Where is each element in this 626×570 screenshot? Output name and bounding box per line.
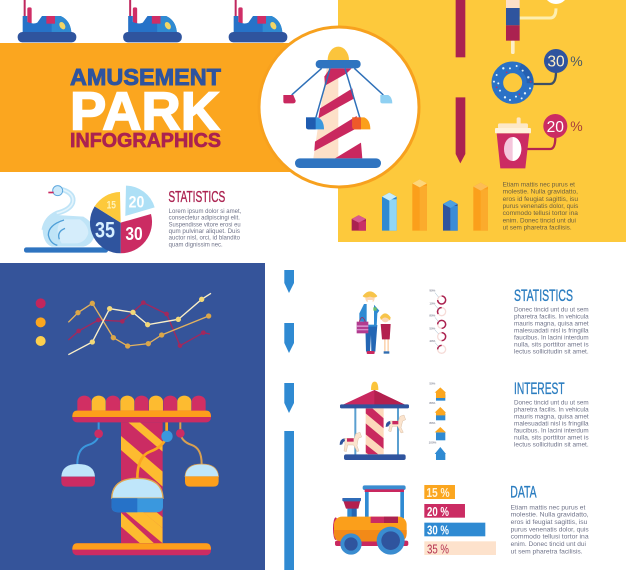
text block: statistics: consectetur adipiscingi elit. — [169, 215, 240, 222]
pie chart: 30 — [125, 223, 143, 244]
percent bars: 15 % — [426, 486, 450, 500]
text block: yellow panel: commodo tellusi tortor ina — [503, 210, 578, 217]
small donut gauges: 50% — [429, 326, 436, 330]
panel: orange title band — [0, 43, 300, 172]
small donut gauges: 80% — [429, 314, 436, 318]
pie chart: 35 — [95, 217, 115, 242]
text block: yellow panel: ut sem pharetra facilisis. — [503, 224, 572, 231]
text block: interest: faucibus. In lacini interdum — [514, 428, 589, 435]
icon: cup with 20 percent: % — [570, 118, 583, 134]
panel: blue panel contents — [36, 293, 219, 555]
percent bars — [424, 485, 496, 556]
text block: interest: mauris magna, quisa amet — [514, 414, 589, 421]
small house icons: 80% — [429, 421, 436, 425]
icon: cup with 20 percent — [495, 114, 583, 168]
arrow: blue 1 — [284, 270, 294, 293]
heading: statistics: STATISTICS — [514, 287, 573, 305]
percent bars: 35 % — [427, 542, 449, 556]
heading: statistics: STATISTICS — [168, 189, 225, 206]
panel: yellow background — [338, 0, 626, 242]
chart legend — [36, 298, 46, 346]
text block: data: enim. Donec tincid unt dui — [511, 541, 586, 548]
small house icons — [429, 381, 446, 460]
text block: statistics — [514, 306, 589, 356]
text block: statistics: faucibus. In lacini interdum — [514, 335, 589, 342]
icon: swing tower — [283, 47, 392, 168]
text block: statistics — [169, 208, 242, 248]
icon: popsicle — [506, 0, 568, 54]
title — [70, 64, 221, 152]
percent bars: 20 % — [427, 505, 449, 519]
icon: carousel with horses — [340, 382, 409, 460]
arrow: blue 3 — [284, 383, 294, 413]
heading: data: DATA — [510, 483, 537, 501]
text block: yellow panel: enim. Donec tincid unt dui — [503, 217, 576, 224]
title: INFOGRAPHICS — [70, 130, 221, 152]
text block: statistics: Donec tincid unt du ut sem — [514, 306, 589, 313]
icon: train — [333, 485, 408, 555]
text block: data: molestie. Nulla gravidatto, — [511, 512, 589, 519]
text block: statistics: quam dignissim nec. — [169, 241, 223, 248]
icon: donut with 30 percent: % — [570, 53, 583, 69]
icon: parent and child — [357, 291, 391, 354]
text block: statistics: qum pulvinar aliquet. Duis — [169, 228, 240, 235]
text block: data: eros id feugiat sagittis, isu — [511, 519, 588, 526]
text block: yellow panel: Etiam mattis nec purus et — [503, 181, 575, 188]
icon: bumper car 1 — [18, 0, 76, 42]
panel: data section — [333, 483, 589, 556]
icon: swing carousel — [61, 396, 219, 555]
small donut gauges: 10% — [429, 301, 436, 305]
small donut gauges: 40% — [429, 339, 436, 343]
text block: statistics: nulla, sits porttitor amet is — [514, 342, 589, 349]
panel: swan and pie statistics — [24, 186, 242, 253]
text block: statistics: malesuadati nisl is fringilla — [514, 328, 589, 335]
bar chart — [352, 179, 488, 231]
text block: statistics: Suspendisse vitore erosi eu — [169, 221, 241, 228]
text block: statistics: auctor nisl, orci, id blandito — [169, 235, 240, 242]
pie chart: 20 — [129, 192, 144, 211]
small donut gauges: 90% — [429, 289, 436, 293]
arrow: crimson lower — [456, 97, 465, 163]
text block: yellow panel — [503, 181, 578, 231]
text block: interest: Donec tincid unt du ut sem — [514, 399, 589, 406]
title: PARK — [70, 82, 220, 142]
small house icons: 80% — [429, 401, 436, 405]
text block: data: Etiam mattis nec purus et — [511, 504, 586, 511]
title: AMUSEMENT — [70, 64, 221, 90]
text block: interest: malesuadati nisl is fringilla — [514, 421, 589, 428]
text block: yellow panel: molestie. Nulla gravidatto, — [503, 189, 578, 196]
icon: cup with 20 percent: 20 — [547, 119, 564, 136]
arrow: crimson top — [456, 0, 465, 57]
pie chart — [90, 186, 155, 253]
text block: data: purus venenatis dolor, quis — [511, 526, 589, 533]
pie chart: 15 — [107, 199, 116, 211]
text block: interest: lectus sollicitudin sit amet. — [514, 442, 589, 449]
icon: donut with 30 percent: 30 — [547, 54, 565, 71]
heading: interest: INTEREST — [514, 380, 565, 398]
small house icons: 100% — [429, 441, 437, 445]
text block: statistics: lectus sollicitudin sit amet. — [514, 349, 589, 356]
text block: statistics: Lorem ipsum dolor si amet, — [169, 208, 242, 215]
arrow: blue 4 — [284, 431, 294, 570]
line chart — [68, 293, 211, 355]
small house icons: 50% — [429, 381, 436, 385]
icon: swan — [24, 186, 108, 253]
text block: data: commodo tellusi tortor ina — [511, 534, 589, 541]
panel: blue carousel background — [0, 263, 265, 570]
text block: interest: pharetra facilis. In vehicula — [514, 407, 589, 414]
percent bars: 30 % — [427, 524, 449, 538]
text block: yellow panel: eros id feugiat sagittis, isu — [503, 196, 578, 203]
text block: interest: nulla, sits porttitor amet is — [514, 435, 589, 442]
text block: data — [511, 504, 589, 555]
arrow: blue 2 — [284, 323, 294, 353]
panel: yellow panel contents — [352, 0, 583, 231]
text block: statistics: mauris magna, quisa amet — [514, 321, 589, 328]
small donut gauges — [429, 289, 446, 353]
text block: yellow panel: purus venenatis dolor, quis — [503, 203, 578, 210]
icon: swing tower in circle — [259, 27, 419, 187]
row of bumper cars — [18, 0, 287, 42]
icon: bumper car 3 — [229, 0, 287, 42]
icon: bumper car 2 — [123, 0, 182, 42]
panel: right column — [284, 270, 589, 570]
text block: interest — [514, 399, 589, 449]
text block: data: ut sem pharetra facilisis. — [511, 548, 583, 555]
text block: statistics: pharetra facilis. In vehicula — [514, 314, 589, 321]
icon: donut with 30 percent — [493, 49, 583, 101]
